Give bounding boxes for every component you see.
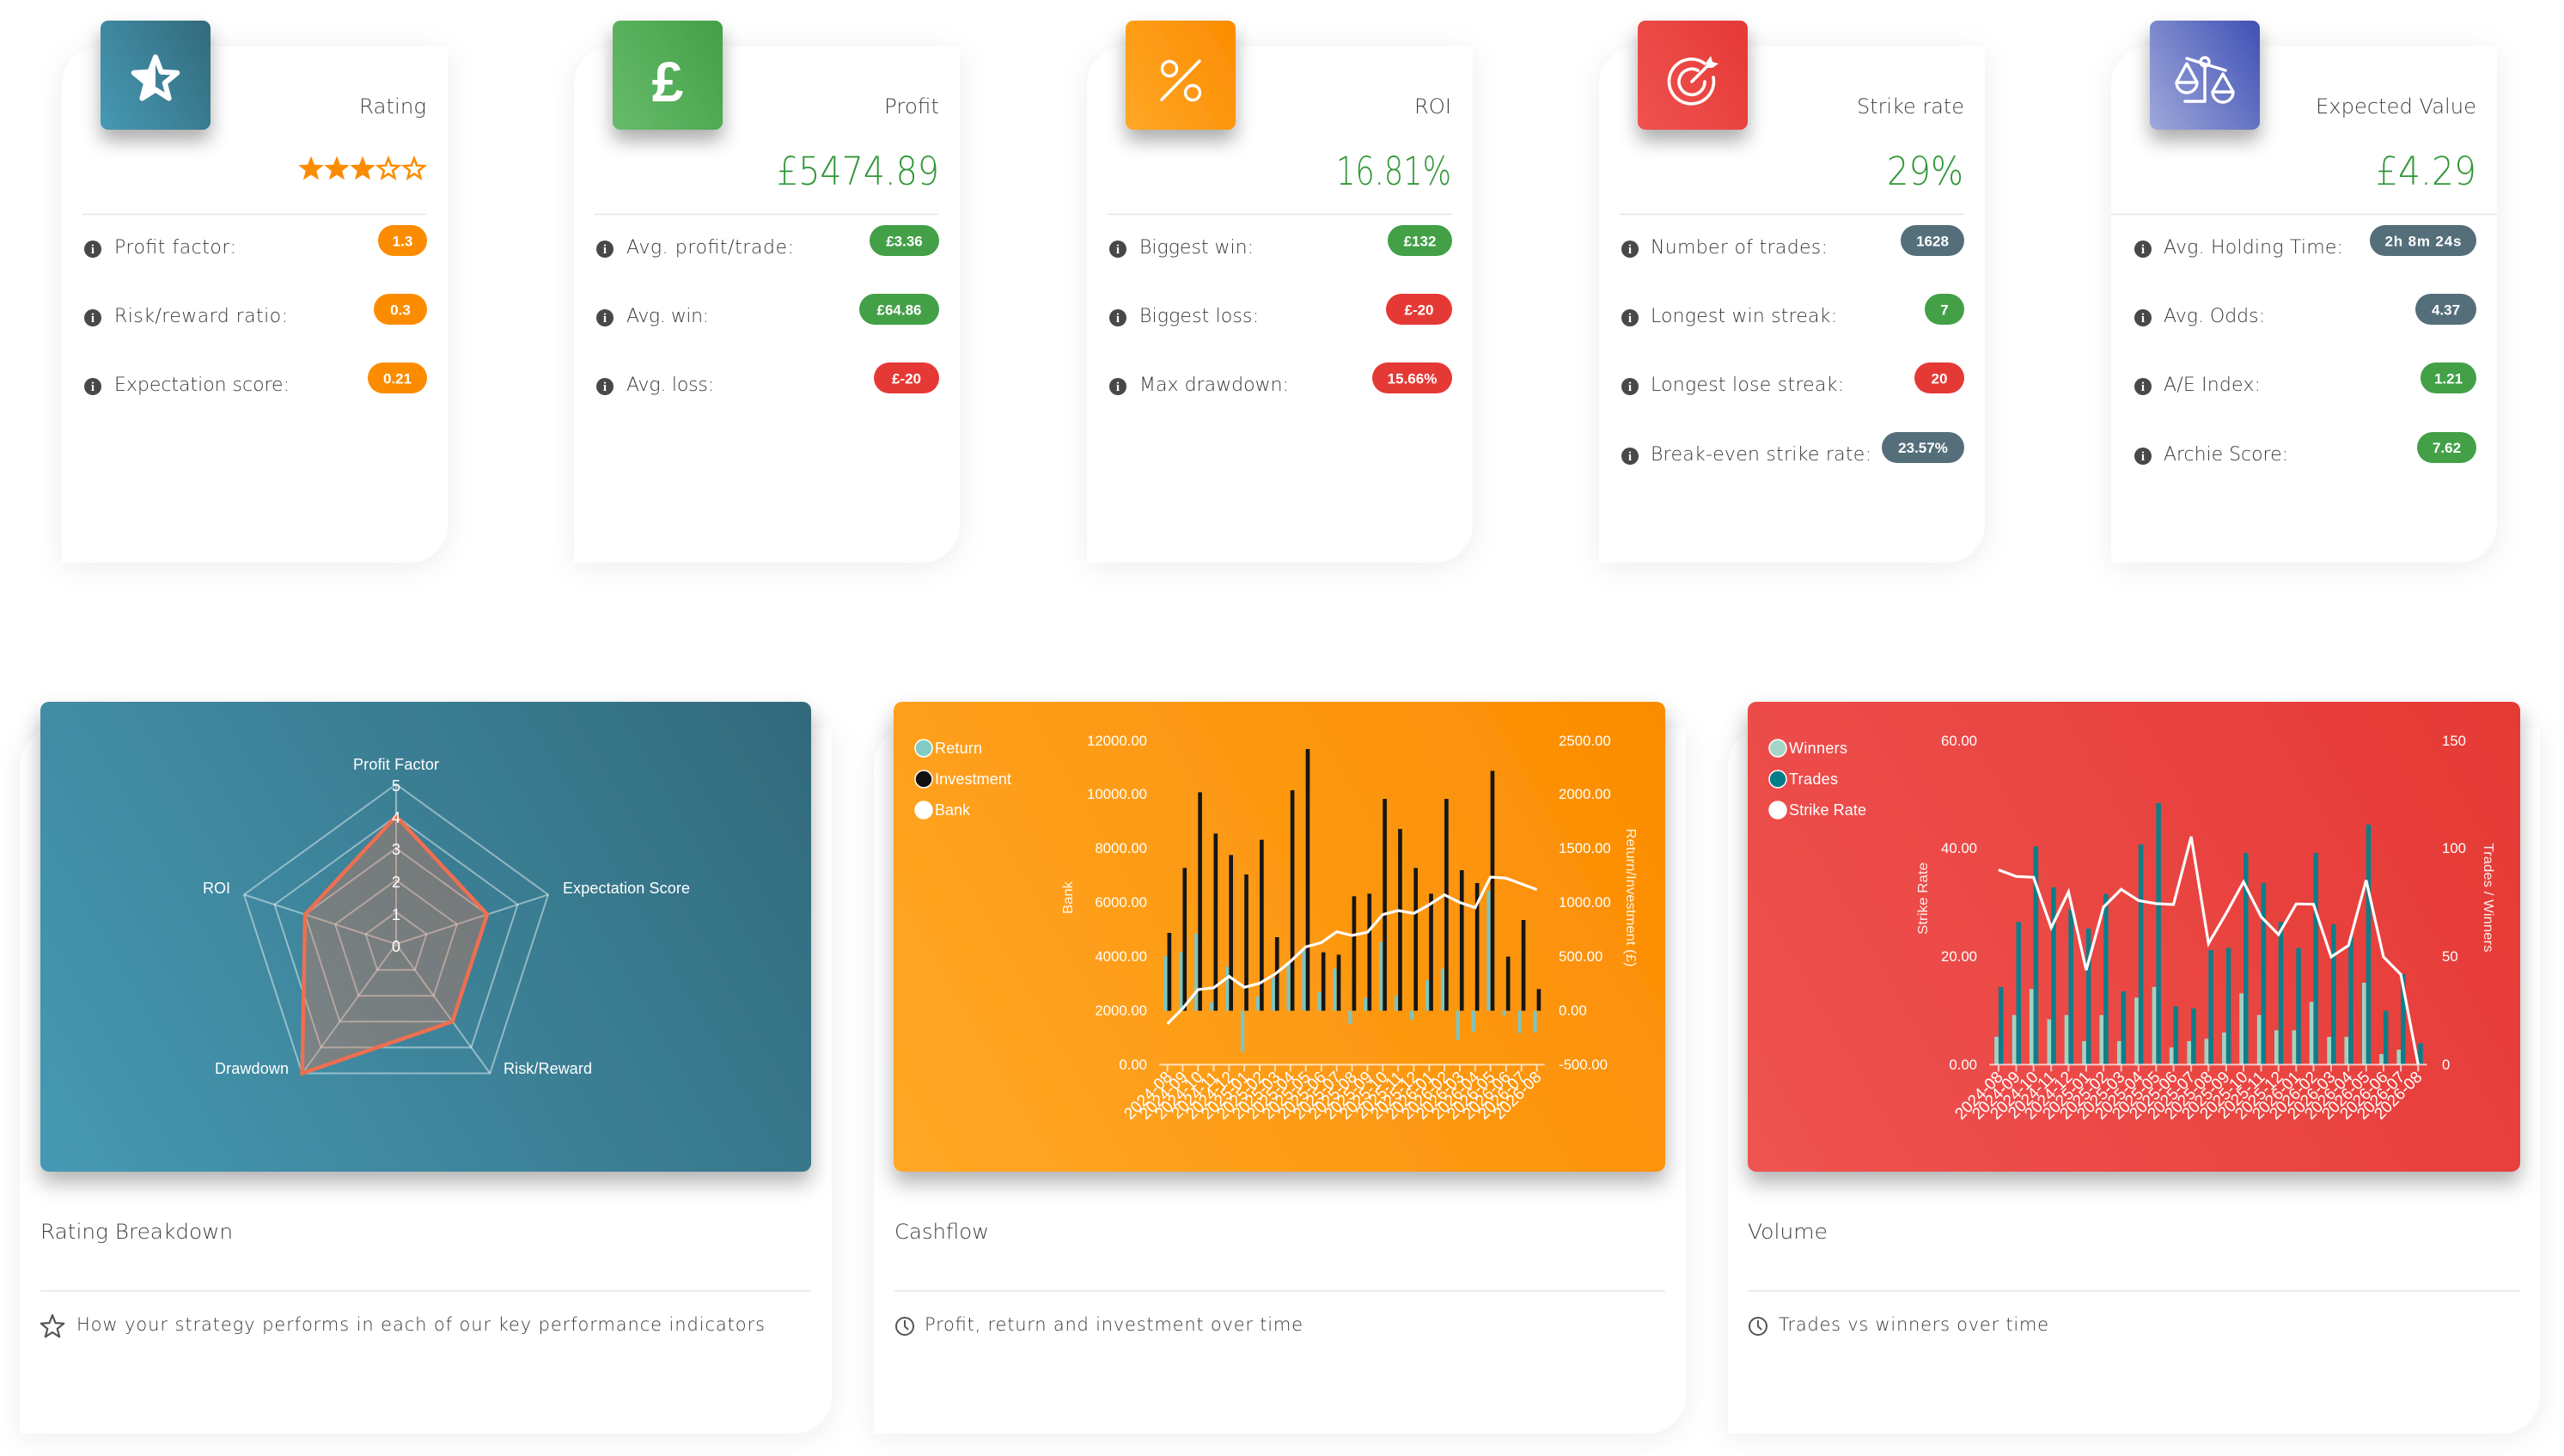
x axis date labels: volume (1951, 1068, 2427, 1124)
row: risk/reward ratio: i (91, 312, 95, 326)
heading: rating: Rating (359, 94, 426, 119)
row: average odds: 4.37 (2432, 302, 2460, 318)
panel: ROI card (1087, 21, 1473, 563)
radar tick labels: 2 (392, 874, 400, 891)
row: biggest win: £132 (1404, 234, 1436, 249)
left axis: bank (1061, 733, 1147, 1073)
heading: expected value: Expected Value (2316, 94, 2476, 119)
bars: winners (1994, 983, 2401, 1064)
row: max drawdown: i (1116, 381, 1120, 394)
right axis: return and investment: 1500.00 (1559, 840, 1611, 856)
row: longest lose streak: Longest lose streak: (1651, 375, 1844, 396)
x axis date labels: cashflow: 2024-12 (1182, 1069, 1238, 1124)
x axis date labels: cashflow: 2025-02 (1213, 1069, 1269, 1124)
x axis date labels: cashflow: 2024-11 (1168, 1069, 1223, 1123)
row: number of trades: Number of trades: (1651, 237, 1828, 259)
row: archie score: Archie Score: (2164, 444, 2288, 466)
left axis: strike rate: 60.00 (1941, 733, 1977, 749)
row: average profit per trade: Avg. profit/trade: (626, 237, 794, 259)
row: average odds: Avg. Odds: (2164, 306, 2265, 327)
row: expectation score: Expectation score: (114, 375, 290, 396)
heading: strike rate: Strike rate (1857, 94, 1964, 119)
icon: pound sign (613, 21, 723, 130)
left axis: bank: 6000.00 (1095, 894, 1147, 911)
row: average holding time: i (2141, 243, 2145, 257)
x axis date labels: volume: 2025-04 (2091, 1068, 2147, 1124)
x axis date labels: volume: 2025-12 (2231, 1069, 2287, 1124)
right axis: trades and winners (2442, 733, 2495, 1073)
axis line and ticks (1159, 1064, 1544, 1071)
left axis: bank: 8000.00 (1095, 840, 1147, 856)
x axis date labels: cashflow: 2024-10 (1151, 1069, 1207, 1124)
icon: half star (101, 21, 211, 130)
panel: volume (1728, 702, 2540, 1434)
right axis: trades and winners: Trades / Winners (2481, 844, 2495, 952)
radar axis labels (203, 756, 690, 1077)
legend: volume: Winners (1789, 740, 1847, 757)
panel: strike rate card (1599, 21, 1985, 563)
right axis: trades and winners: 100 (2442, 840, 2466, 856)
left axis: bank: Bank (1061, 880, 1076, 914)
legend: volume: Trades (1789, 771, 1838, 788)
x axis date labels: cashflow: 2026-02 (1398, 1069, 1454, 1124)
x axis date labels: volume: 2025-02 (2056, 1069, 2112, 1124)
row: longest lose streak (1621, 362, 1964, 396)
legend: volume (1769, 740, 1866, 819)
row: max drawdown: 15.66% (1388, 371, 1437, 387)
row: longest win streak: Longest win streak: (1651, 306, 1837, 327)
panel: rating card (62, 21, 448, 563)
x axis date labels: cashflow: 2024-09 (1136, 1069, 1192, 1124)
right axis: trades and winners: 0 (2442, 1057, 2450, 1073)
x axis date labels: volume: 2025-01 (2039, 1069, 2095, 1124)
x axis date labels: volume: 2024-10 (1987, 1069, 2042, 1124)
legend: cashflow: Investment (935, 771, 1011, 788)
row: break-even strike rate: i (1628, 450, 1632, 464)
row: number of trades (1621, 225, 1964, 259)
x axis date labels: cashflow: 2025-08 (1305, 1069, 1361, 1124)
row: profit factor: 1.3 (393, 234, 412, 249)
chart title: volume: Volume (1748, 1220, 1828, 1244)
right axis: trades and winners: 50 (2442, 948, 2458, 965)
row: A/E index: A/E Index: (2164, 375, 2261, 396)
panel: profit card (574, 21, 960, 563)
x axis date labels: cashflow: 2026-01 (1383, 1069, 1438, 1124)
x axis date labels: volume: 2025-11 (2214, 1069, 2269, 1123)
x axis date labels: volume: 2025-06 (2126, 1069, 2182, 1124)
row: profit factor (84, 225, 427, 259)
x axis date labels: cashflow: 2026-05 (1444, 1069, 1499, 1124)
right axis: return and investment: 1000.00 (1559, 894, 1611, 911)
panel: rating breakdown (20, 702, 832, 1434)
x axis date labels: cashflow (1120, 1068, 1546, 1124)
radar tick labels: 5 (392, 777, 400, 795)
right axis: return and investment: 2500.00 (1559, 733, 1611, 749)
radar tick labels: 4 (392, 809, 400, 826)
right axis: return and investment: 500.00 (1559, 948, 1602, 965)
row: profit factor: Profit factor: (114, 237, 236, 259)
x axis date labels: cashflow: 2025-12 (1367, 1069, 1423, 1124)
row: average holding time: 2h 8m 24s (2385, 234, 2461, 249)
row: biggest win: i (1116, 243, 1120, 257)
row: break-even strike rate: 23.57% (1898, 440, 1948, 456)
radar axis labels: Drawdown (215, 1060, 289, 1077)
x axis date labels: volume: 2024-09 (1969, 1069, 2024, 1124)
left axis: strike rate: 0.00 (1949, 1057, 1977, 1073)
bars: trades (1999, 803, 2423, 1064)
left axis: bank: 10000.00 (1087, 786, 1147, 802)
left axis: strike rate: 20.00 (1941, 948, 1977, 965)
legend: cashflow (915, 740, 1011, 819)
row: average odds: i (2141, 312, 2145, 326)
row: expectation score: 0.21 (383, 371, 412, 387)
radar chart (203, 756, 690, 1077)
row: longest lose streak: 20 (1932, 371, 1947, 387)
row: risk/reward ratio: 0.3 (390, 302, 411, 318)
row: number of trades: i (1628, 243, 1632, 257)
panel: expected value card (2111, 21, 2497, 563)
row: average loss (596, 362, 939, 396)
x axis date labels: volume: 2024-11 (2005, 1069, 2060, 1123)
row: longest win streak: 7 (1940, 302, 1949, 318)
row: expectation score (84, 362, 427, 396)
panel: cashflow (874, 702, 1686, 1434)
row: average holding time (2134, 225, 2476, 259)
icon: pound sign: £ (652, 50, 684, 113)
row: longest win streak (1621, 294, 1964, 327)
right axis: return and investment: Return/Investment (£) (1623, 828, 1638, 967)
row: number of trades: 1628 (1916, 234, 1949, 249)
chart title: cashflow: Cashflow (894, 1220, 989, 1244)
row: A/E index: 1.21 (2434, 371, 2463, 387)
x axis date labels: volume: 2025-08 (2161, 1069, 2217, 1124)
x axis date labels: volume: 2026-02 (2266, 1069, 2322, 1124)
legend: volume: Strike Rate (1789, 801, 1866, 819)
x axis date labels: cashflow: 2025-03 (1229, 1069, 1285, 1124)
row: longest lose streak: i (1628, 381, 1632, 394)
x axis date labels: cashflow: 2026-08 (1490, 1069, 1546, 1124)
x axis date labels: volume: 2025-03 (2073, 1069, 2129, 1124)
row: biggest win (1109, 225, 1452, 259)
row: average profit per trade: £3.36 (886, 234, 923, 249)
x axis date labels: volume: 2025-09 (2178, 1069, 2234, 1124)
x axis date labels: volume: 2026-08 (2371, 1069, 2427, 1124)
x axis date labels: cashflow: 2025-09 (1321, 1069, 1377, 1124)
row: biggest loss: i (1116, 312, 1120, 326)
combo chart: volume (1989, 803, 2427, 1071)
x axis date labels: volume: 2026-06 (2336, 1069, 2392, 1124)
row: longest win streak: i (1628, 312, 1632, 326)
value: strike rate: 29% (1887, 149, 1963, 194)
right axis: return and investment (1559, 733, 1638, 1073)
x axis date labels: volume: 2024-08 (1951, 1069, 2007, 1124)
left axis: bank: 12000.00 (1087, 733, 1147, 749)
radar tick labels: 3 (392, 841, 400, 858)
row: A/E index (2134, 362, 2476, 396)
row: archie score (2134, 432, 2476, 466)
x axis date labels: cashflow: 2026-03 (1413, 1069, 1468, 1124)
x axis date labels: cashflow: 2026-04 (1428, 1068, 1484, 1124)
axis line and ticks (1989, 1064, 2427, 1071)
row: risk/reward ratio: Risk/reward ratio: (114, 306, 288, 327)
heading: ROI: ROI (1414, 94, 1451, 119)
x axis date labels: volume: 2025-05 (2109, 1069, 2164, 1124)
row: A/E index: i (2141, 381, 2145, 394)
radar axis labels: Risk/Reward (504, 1060, 592, 1077)
value: expected value: £4.29 (2376, 149, 2476, 194)
x axis date labels: cashflow: 2026-06 (1459, 1069, 1515, 1124)
right axis: trades and winners: 150 (2442, 733, 2466, 749)
x axis date labels: volume: 2026-04 (2301, 1068, 2357, 1124)
row: profit factor: i (91, 243, 95, 257)
value: profit: £5474.89 (777, 149, 939, 194)
row: risk/reward ratio (84, 294, 427, 327)
left axis: strike rate (1916, 733, 1977, 1073)
row: biggest loss (1109, 294, 1452, 327)
row: average win: i (603, 312, 607, 326)
row: archie score: 7.62 (2433, 440, 2461, 456)
row: max drawdown: Max drawdown: (1139, 375, 1289, 396)
x axis date labels: cashflow: 2025-07 (1290, 1069, 1346, 1124)
icon: percent (1126, 21, 1236, 130)
row: break-even strike rate (1621, 432, 1964, 466)
radar axis labels: Profit Factor (353, 756, 439, 773)
icon: balance scales (2150, 21, 2260, 130)
x axis date labels: cashflow: 2025-06 (1274, 1069, 1330, 1124)
row: average loss: Avg. loss: (626, 375, 714, 396)
caption with clock icon: Profit, return and investment over time (925, 1314, 1303, 1335)
row: average win: Avg. win: (626, 306, 709, 327)
row: average loss: i (603, 381, 607, 394)
radar tick labels: 1 (392, 906, 400, 923)
row: max drawdown (1109, 362, 1452, 396)
row: break-even strike rate: Break-even strike rate: (1651, 444, 1871, 466)
x axis date labels: volume: 2026-01 (2249, 1069, 2305, 1124)
row: average profit per trade (596, 225, 939, 259)
row: average win: £64.86 (876, 302, 921, 318)
star rating: 3 of 5 (300, 157, 424, 179)
x axis date labels: cashflow: 2025-01 (1198, 1069, 1254, 1124)
row: expectation score: i (91, 381, 95, 394)
legend: cashflow: Return (935, 740, 982, 757)
heading: profit: Profit (884, 94, 939, 119)
value: ROI: 16.81% (1336, 149, 1451, 194)
row: archie score: i (2141, 450, 2145, 464)
x axis date labels: volume: 2026-05 (2318, 1069, 2374, 1124)
right axis: return and investment: 0.00 (1559, 1002, 1587, 1019)
x axis date labels: volume: 2026-03 (2284, 1069, 2340, 1124)
radar axis labels: ROI (203, 880, 230, 897)
x axis date labels: volume: 2025-10 (2196, 1069, 2252, 1124)
right axis: return and investment: 2000.00 (1559, 786, 1611, 802)
row: biggest loss: £-20 (1404, 302, 1434, 318)
left axis: bank: 0.00 (1119, 1057, 1147, 1073)
radar tick labels (392, 777, 400, 955)
bars: return (1163, 891, 1537, 1052)
row: average profit per trade: i (603, 243, 607, 257)
right axis: return and investment: -500.00 (1559, 1057, 1608, 1073)
row: average odds (2134, 294, 2476, 327)
line: strike rate (1999, 837, 2418, 1064)
radar tick labels: 0 (392, 938, 400, 955)
x axis date labels: cashflow: 2025-04 (1243, 1068, 1299, 1124)
left axis: strike rate: Strike Rate (1916, 862, 1931, 935)
caption with star icon: How your strategy performs in each of our key performance indicators (76, 1314, 765, 1335)
left axis: strike rate: 40.00 (1941, 840, 1977, 856)
row: average holding time: Avg. Holding Time: (2164, 237, 2343, 259)
x axis date labels: cashflow: 2025-11 (1352, 1069, 1407, 1123)
row: average loss: £-20 (892, 371, 921, 387)
x axis date labels: volume: 2025-07 (2144, 1069, 2200, 1124)
icon: target with arrow (1638, 21, 1748, 130)
x axis date labels: cashflow: 2025-10 (1336, 1069, 1392, 1124)
x axis date labels: cashflow: 2024-08 (1120, 1069, 1176, 1124)
left axis: bank: 2000.00 (1095, 1002, 1147, 1019)
row: biggest win: Biggest win: (1139, 237, 1254, 259)
line: bank (1168, 877, 1537, 1024)
row: average win (596, 294, 939, 327)
chart title: rating breakdown: Rating Breakdown (40, 1220, 233, 1244)
row: biggest loss: Biggest loss: (1139, 306, 1259, 327)
x axis date labels: cashflow: 2026-07 (1474, 1069, 1530, 1124)
x axis date labels: volume: 2026-07 (2353, 1069, 2409, 1124)
combo chart: cashflow (1159, 749, 1544, 1071)
x axis date labels: volume: 2024-12 (2021, 1069, 2077, 1124)
radar axis labels: Expectation Score (563, 880, 690, 897)
left axis: bank: 4000.00 (1095, 948, 1147, 965)
bars: investment (1168, 749, 1541, 1011)
caption with clock icon: Trades vs winners over time (1779, 1314, 2048, 1335)
x axis date labels: cashflow: 2025-05 (1259, 1069, 1315, 1124)
legend: cashflow: Bank (935, 801, 971, 819)
